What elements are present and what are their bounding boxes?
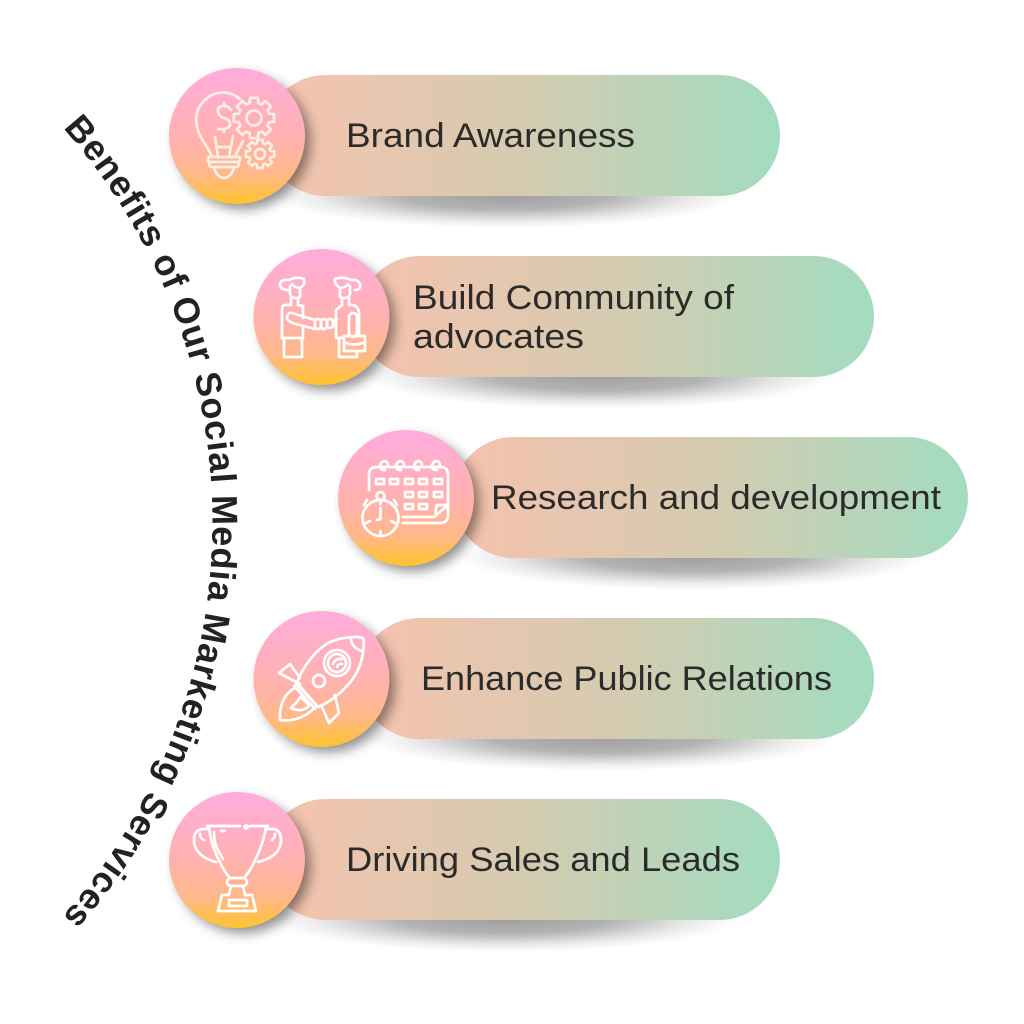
row 2: build community <box>254 249 874 409</box>
badge 4 <box>254 611 390 747</box>
pill 2 <box>359 256 874 377</box>
icon: trophy <box>194 826 281 911</box>
label: brand awareness: Brand Awareness <box>346 117 635 155</box>
icon: calendar and stopwatch <box>362 461 448 536</box>
pill 4 <box>359 618 874 739</box>
label: research and development: Research and development <box>491 479 942 517</box>
label: enhance public relations: Enhance Public Relations <box>421 660 832 698</box>
icon: light bulb and gears <box>196 92 274 178</box>
badge 2 <box>254 249 390 385</box>
pill 5 <box>265 799 780 920</box>
title: curved heading: Benefits of Our Social Media Marketing Services <box>64 114 238 926</box>
row 3: research and development <box>338 430 968 590</box>
pill 1 <box>265 75 780 196</box>
pill 3 <box>453 437 968 558</box>
label: build community of advocates: advocates <box>413 318 584 356</box>
row 4: enhance public relations <box>254 611 874 771</box>
icon: rocket <box>279 637 364 723</box>
label: build community of advocates: Build Community of <box>413 279 735 317</box>
label: driving sales and leads: Driving Sales and Leads <box>346 841 740 879</box>
row 1: brand awareness <box>169 68 780 228</box>
badge 1 <box>169 68 305 204</box>
row 5: driving sales and leads <box>169 792 780 952</box>
badge 5 <box>169 792 305 928</box>
badge 3 <box>338 430 474 566</box>
icon: handshake <box>280 278 365 357</box>
